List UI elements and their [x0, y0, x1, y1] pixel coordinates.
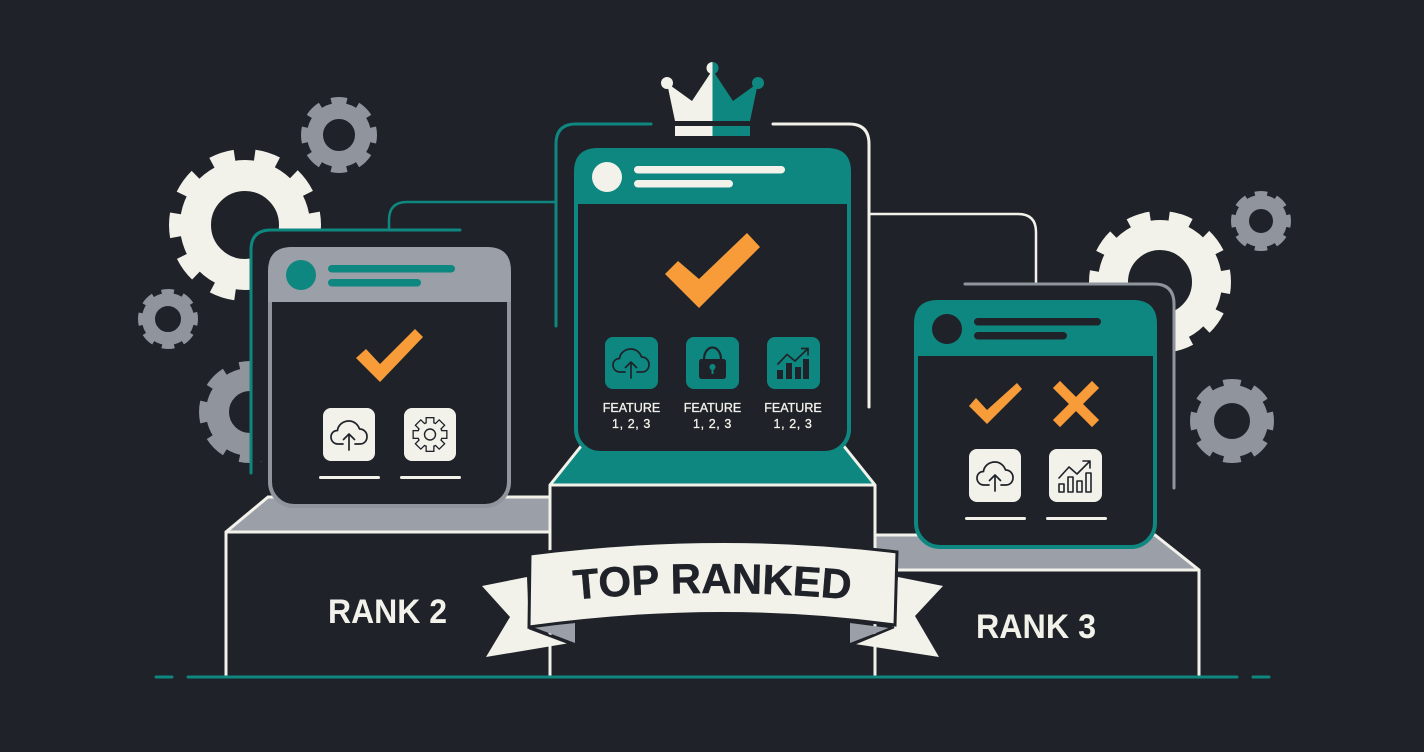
feature: lock: 1, 2, 3 [693, 417, 732, 431]
feature: growth chart: FEATURE [764, 401, 822, 415]
icon: upload [323, 408, 375, 461]
back frame: rank 3 [965, 284, 1174, 488]
panel: rank 3 window [914, 300, 1157, 547]
back frame: rank 2 [251, 230, 460, 473]
back frame: top panel teal side [556, 124, 651, 326]
ribbon tail left [482, 577, 570, 657]
gear: gray mid right [1194, 382, 1270, 460]
panel: rank 2 window [268, 247, 511, 506]
fold shadows [529, 627, 894, 645]
podium: rank 2 [226, 497, 550, 676]
placeholder lines [319, 476, 461, 479]
title lines [328, 265, 455, 286]
ribbon body [529, 541, 897, 627]
gear: gray lower left [203, 365, 297, 459]
feature: upload: FEATURE [603, 401, 660, 415]
placeholder lines [965, 517, 1107, 520]
feature: lock: FEATURE [684, 401, 741, 415]
label: rank 2: RANK 2 [328, 593, 447, 631]
gear: large cream right [1096, 218, 1224, 346]
gear: large cream left [176, 156, 314, 294]
cross mark [1060, 388, 1092, 420]
banner: top ranked [482, 543, 943, 657]
baseline [156, 676, 1269, 678]
label: rank 3: RANK 3 [976, 608, 1096, 646]
banner title: TOP RANKED [572, 564, 850, 599]
ribbon tail right [855, 577, 943, 657]
podium: rank 3 [875, 535, 1199, 676]
title lines [634, 166, 785, 188]
window header [574, 148, 851, 204]
feature: lock [684, 337, 741, 431]
avatar [286, 260, 316, 290]
icon: upload [969, 449, 1021, 502]
gear: gray top [305, 101, 373, 169]
icon: gear [404, 408, 456, 461]
feature: upload [603, 337, 660, 431]
icon: chart [1049, 449, 1102, 502]
gear: small gray left [141, 292, 195, 346]
connector: teal from rank 2 to top panel [389, 202, 556, 230]
window header [914, 300, 1157, 356]
check mark [969, 383, 1022, 424]
ribbon folds [533, 623, 889, 643]
feature: growth chart: 1, 2, 3 [774, 417, 812, 431]
crown [661, 62, 764, 136]
avatar [932, 314, 962, 344]
check mark [665, 233, 760, 308]
connector: white from top panel to rank 3 [869, 214, 1036, 284]
title lines [974, 318, 1101, 340]
feature: growth chart [764, 337, 822, 431]
window header [268, 247, 511, 302]
back frame: top panel white side [773, 124, 869, 407]
podium: rank 1 [550, 445, 875, 676]
gear: gray top right [1234, 194, 1288, 248]
check mark [356, 329, 423, 382]
avatar [592, 162, 622, 192]
feature: upload: 1, 2, 3 [612, 417, 651, 431]
panel: rank 1 window [574, 148, 851, 453]
